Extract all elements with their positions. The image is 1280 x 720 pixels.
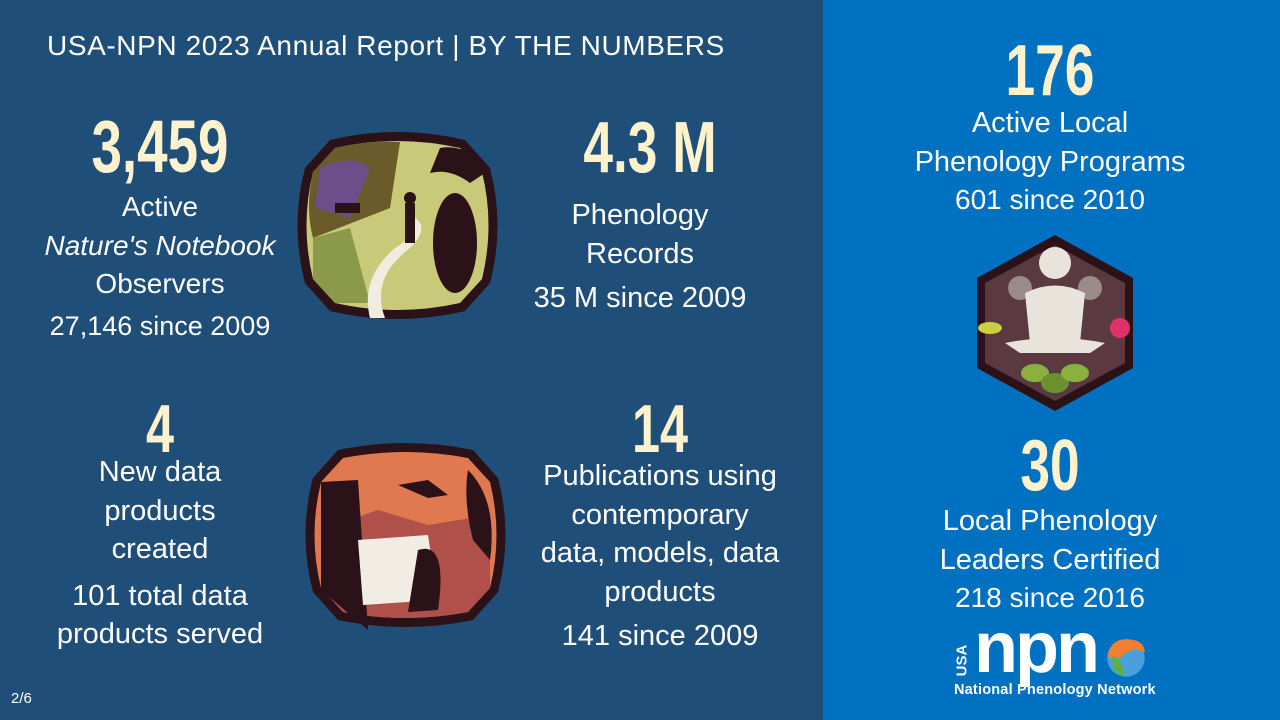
text: records: Records	[586, 238, 694, 270]
text: observers: 27,146 since 2009	[50, 310, 270, 340]
title: USA-NPN 2023 Annual Report | BY THE NUMBERS	[47, 30, 725, 61]
text: programs: 601 since 2010	[955, 184, 1145, 215]
text: publications: products	[604, 576, 716, 608]
stat: phenology records	[534, 108, 746, 314]
text: observers: Nature's Notebook	[44, 230, 276, 260]
text: leaders	[940, 505, 1160, 613]
number 4.3 M: 4.3 M	[583, 108, 717, 188]
text: data products: products served	[57, 618, 263, 650]
stat: new data products	[57, 391, 263, 650]
number 14: 14	[632, 391, 688, 467]
stat: local phenology programs	[915, 31, 1185, 215]
text: data products	[57, 456, 263, 650]
text: data products: created	[112, 533, 208, 565]
text: data products: New data	[99, 456, 221, 488]
page number: 2/6	[11, 690, 32, 707]
text: records: Phenology	[571, 199, 709, 231]
logo text npn: npn	[974, 608, 1097, 688]
text: observers	[44, 191, 277, 340]
text: programs: Phenology Programs	[915, 146, 1185, 178]
text: publications: contemporary	[571, 498, 749, 530]
text: records	[534, 199, 746, 314]
number 4: 4	[146, 391, 174, 467]
text: data products: 101 total data	[72, 580, 248, 612]
number 176: 176	[1006, 31, 1094, 111]
text: records: 35 M since 2009	[534, 282, 746, 314]
text: observers: Active	[122, 191, 198, 222]
text: publications: Publications using	[543, 460, 777, 492]
icon: hexagon leaders badge	[977, 235, 1133, 411]
icon: hummingbird badge	[306, 443, 506, 630]
logo text USA: USA	[953, 645, 970, 676]
text: publications: 141 since 2009	[562, 620, 758, 652]
text: programs	[915, 107, 1185, 215]
text: leaders: 218 since 2016	[955, 582, 1145, 613]
text: leaders: Leaders Certified	[940, 544, 1160, 576]
text: publications: data, models, data	[541, 537, 779, 569]
logo: USA-NPN	[953, 608, 1156, 698]
number 3,459: 3,459	[91, 105, 229, 188]
stat: publications	[541, 391, 780, 652]
logo caption: National Phenology Network	[954, 682, 1156, 698]
stat: leaders certified	[940, 426, 1160, 613]
icon: forest badge	[298, 132, 498, 319]
panel: right blue column	[823, 0, 1280, 720]
text: leaders: Local Phenology	[943, 505, 1157, 537]
text: data products: products	[104, 494, 216, 526]
number 30: 30	[1020, 426, 1080, 506]
text: programs: Active Local	[972, 107, 1128, 139]
stat: active observers	[44, 105, 277, 340]
text: observers: Observers	[95, 268, 225, 299]
icon: logo globe	[1107, 639, 1145, 677]
text: publications	[541, 460, 780, 652]
